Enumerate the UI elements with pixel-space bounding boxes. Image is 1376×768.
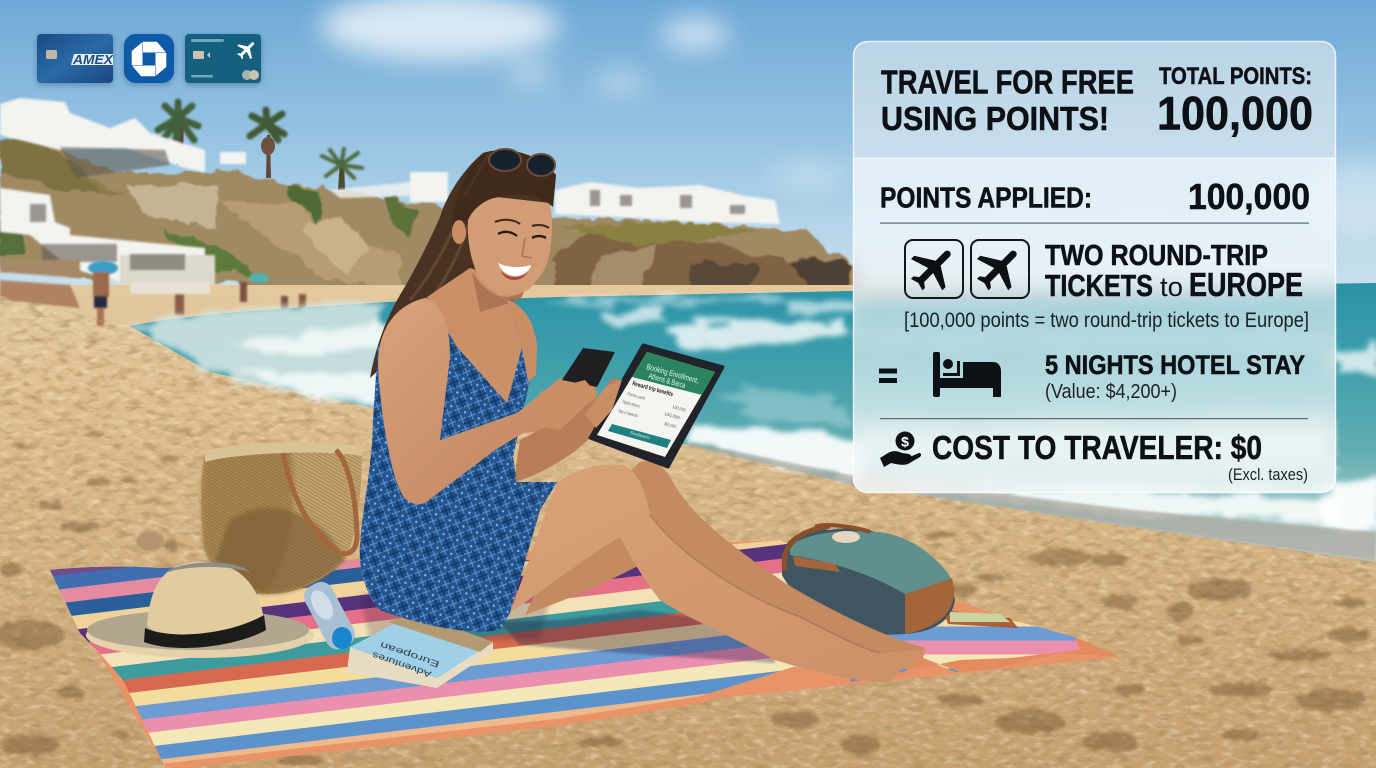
hair over forehead — [452, 150, 556, 225]
amex wordmark: AMEX — [72, 52, 114, 67]
logo: chase octagon — [124, 34, 174, 83]
card: teal travel card — [185, 34, 261, 83]
total points — [1157, 63, 1313, 140]
backpack — [782, 525, 1018, 636]
credit card logos — [37, 34, 261, 83]
beach towel with colourful stripes — [50, 540, 1120, 768]
tablet button label: Redeem — [630, 430, 651, 440]
distant palm trees — [158, 102, 362, 190]
sand base — [0, 285, 1376, 768]
points applied row — [880, 176, 1310, 217]
total points: TOTAL POINTS: — [1159, 63, 1312, 90]
cliff with vegetation — [0, 140, 860, 302]
icon: second plane — [967, 236, 1031, 300]
far leg — [525, 461, 925, 665]
book cover subtitle: Adventures — [370, 650, 433, 680]
tablet showing booking screen — [590, 345, 723, 467]
tablet row lines — [618, 391, 687, 429]
water bottle — [300, 578, 359, 654]
tablet heading: Booking Enrollment, — [645, 362, 700, 385]
hotel text: 5 NIGHTS HOTEL STAY — [1045, 350, 1305, 380]
tickets text: EUROPE — [1189, 266, 1303, 303]
smartphone — [562, 348, 615, 387]
cost to traveler: COST TO TRAVELER: $0 — [932, 429, 1262, 466]
tablet row lines: 100,000 — [664, 411, 681, 420]
building shadows and windows — [30, 147, 745, 270]
smiling features — [495, 220, 549, 280]
straw tote bag — [201, 442, 362, 594]
tablet heading line two: Athens & Barca — [647, 371, 687, 390]
points applied row: 100,000 — [1188, 176, 1310, 217]
tickets text: TWO ROUND-TRIP — [1045, 240, 1268, 272]
hotel text: (Value: $4,200+) — [1045, 381, 1177, 403]
ear — [452, 220, 466, 244]
equals sign — [879, 368, 897, 383]
points applied row: POINTS APPLIED: — [880, 182, 1092, 214]
icon: hand holding coin — [880, 432, 921, 467]
fingers holding phone — [530, 380, 598, 430]
woman sitting on the towel — [360, 149, 925, 682]
heading: travel for free: USING POINTS! — [881, 100, 1109, 137]
sand texture and footprints — [0, 285, 1376, 768]
tickets text: TICKETS — [1045, 268, 1153, 303]
near leg and foot — [510, 464, 925, 682]
tablet subheading: Reward trip benefits — [631, 381, 674, 398]
right forearm and palm — [516, 378, 622, 482]
tablet row lines: Flights Athens — [622, 399, 641, 409]
leg shading — [650, 515, 880, 653]
beach umbrellas and people — [0, 260, 306, 326]
tablet row lines: 100,000 — [672, 404, 687, 413]
straw hat — [86, 562, 314, 658]
sea — [130, 283, 1376, 562]
tablet row lines: Stay in Santorini — [618, 408, 638, 418]
hair highlights — [410, 190, 478, 300]
long brown hair — [370, 150, 556, 378]
patterned blue dress — [360, 297, 557, 632]
book cover title: European — [379, 640, 441, 670]
tax note: (Excl. taxes) — [1228, 466, 1308, 484]
palm thumb over tablet — [585, 380, 622, 428]
chest and neck — [427, 268, 525, 403]
icon: hotel bed — [933, 352, 1001, 397]
sunglasses on head — [465, 149, 555, 195]
icon: first plane — [901, 236, 965, 300]
travel guide book — [347, 613, 493, 688]
left arm and forearm — [378, 298, 597, 504]
tablet row lines: Points used — [627, 391, 646, 401]
white buildings — [0, 98, 780, 291]
heading: travel for free — [881, 64, 1134, 137]
conversion note: [100,000 points = two round-trip tickets to Europe] — [904, 309, 1309, 332]
wet shoreline band — [690, 442, 1376, 562]
card: amex — [37, 34, 114, 83]
heading: travel for free: TRAVEL FOR FREE — [881, 64, 1134, 100]
tickets text — [1045, 240, 1303, 303]
hotel text — [1045, 350, 1305, 403]
icon: hand holding coin: $ — [901, 434, 909, 450]
sky — [0, 0, 1376, 320]
right shoulder — [507, 300, 537, 382]
tablet row lines: $0.00 — [664, 421, 677, 429]
waves and foam — [130, 294, 1376, 535]
rocks on the sand — [136, 531, 164, 551]
clouds — [320, 0, 1376, 240]
total points: 100,000 — [1157, 86, 1313, 140]
panel: points summary glass card — [852, 40, 1336, 494]
face — [468, 197, 552, 296]
tickets text: to — [1160, 272, 1183, 302]
panel blurred glass background — [853, 41, 1336, 493]
